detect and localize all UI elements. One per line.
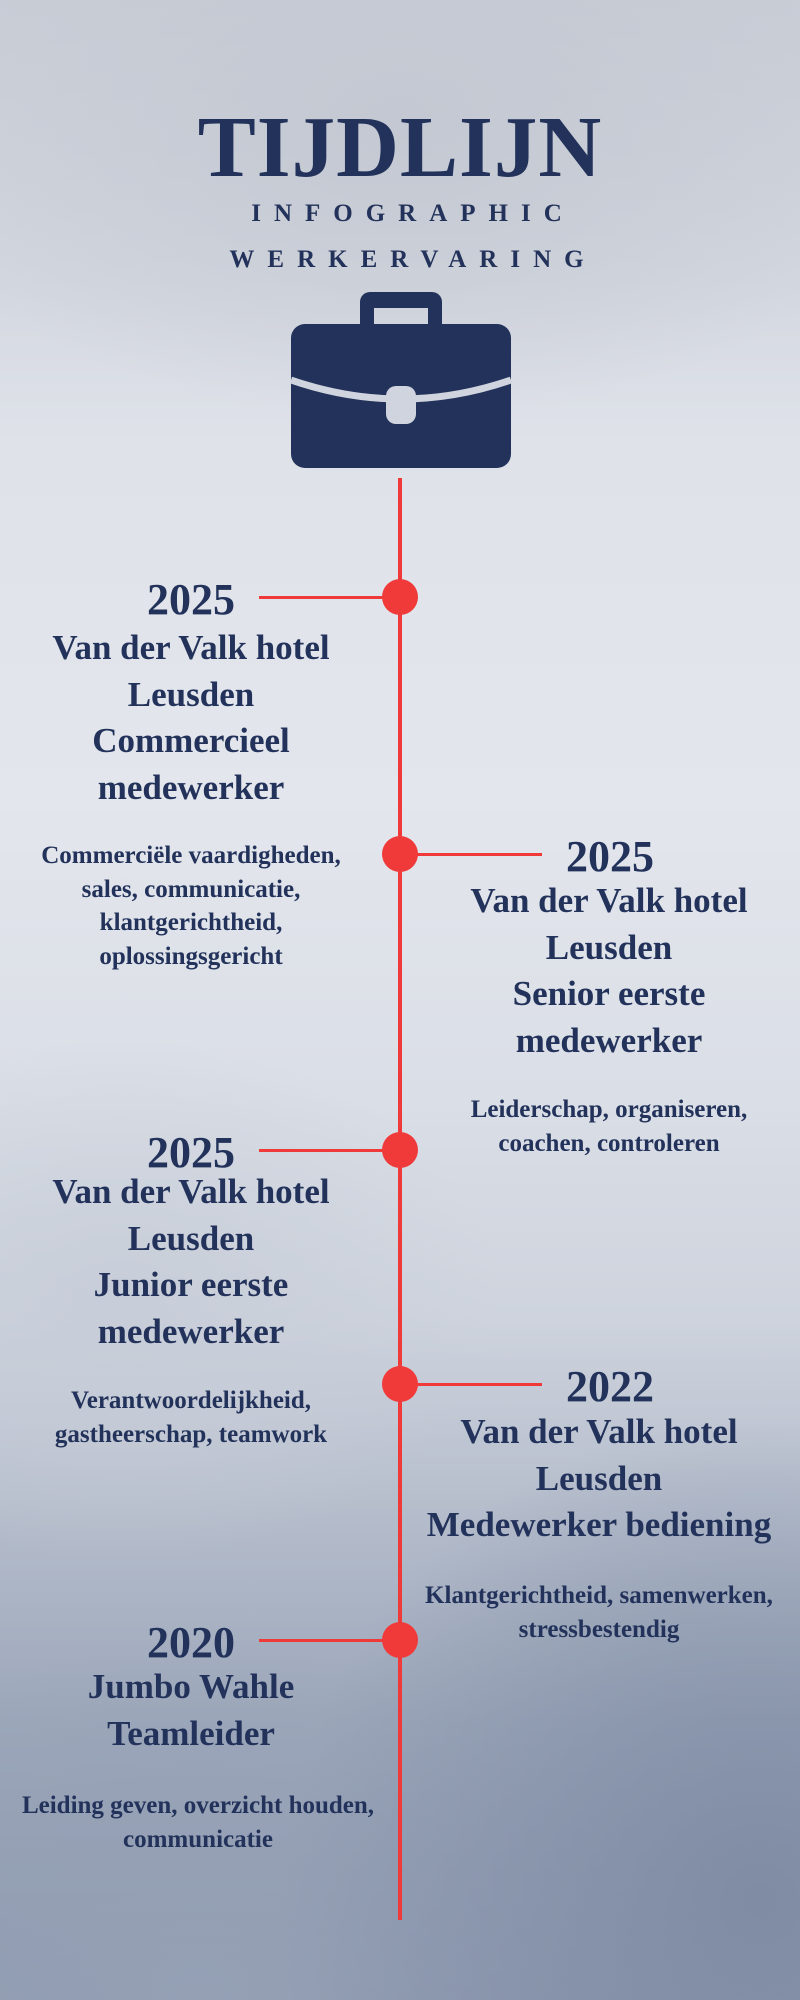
entry 3: Leusden xyxy=(128,1218,254,1258)
entry 5: Teamleider xyxy=(107,1714,275,1752)
entry 4: 2022 xyxy=(566,1362,654,1411)
entry 4: Leusden xyxy=(536,1458,662,1498)
connector xyxy=(400,853,542,856)
entry 2: Leiderschap, organiseren, xyxy=(471,1096,747,1123)
entry 1: sales, communicatie, xyxy=(82,876,300,902)
entry 2: Van der Valk hotel xyxy=(470,881,748,920)
entry 5 xyxy=(22,1618,418,1852)
entry 1: Commerciële vaardigheden, xyxy=(41,842,341,869)
connector xyxy=(259,1149,400,1152)
entry 4: Klantgerichtheid, samenwerken, xyxy=(425,1582,773,1609)
entry 1: oplossingsgericht xyxy=(99,942,283,970)
entry 5: 2020 xyxy=(147,1618,235,1667)
entry 1: klantgerichtheid, xyxy=(100,909,282,936)
connector xyxy=(400,1383,542,1386)
entry 4: Medewerker bediening xyxy=(427,1505,771,1544)
entry 5: Jumbo Wahle xyxy=(88,1667,294,1706)
entry 3: medewerker xyxy=(98,1312,284,1350)
entry 2: Senior eerste xyxy=(513,974,705,1013)
entry 3: Verantwoordelijkheid, xyxy=(71,1387,311,1414)
connector xyxy=(259,1639,400,1642)
entry 3: Van der Valk hotel xyxy=(52,1172,330,1211)
subtitle: INFOGRAPHIC xyxy=(251,200,575,227)
entry 5: communicatie xyxy=(123,1826,273,1852)
entry 1: Van der Valk hotel xyxy=(52,628,330,667)
entry 2: coachen, controleren xyxy=(498,1130,720,1156)
dot xyxy=(382,1132,418,1168)
dot xyxy=(382,1622,418,1658)
entry 3: Junior eerste xyxy=(94,1265,288,1304)
entry 4 xyxy=(382,1362,773,1642)
dot xyxy=(382,836,418,872)
connector xyxy=(259,596,400,599)
entry 1: 2025 xyxy=(147,575,235,624)
entry 2 xyxy=(382,832,748,1156)
entry 3: gastheerschap, teamwork xyxy=(55,1420,327,1448)
entry 1: Leusden xyxy=(128,674,254,714)
entry 1 xyxy=(41,575,418,970)
entry 2: Leusden xyxy=(546,928,672,966)
subtitle line 2: WERKERVARING xyxy=(229,246,597,273)
entry 1: Commercieel xyxy=(92,721,290,760)
entry 4: stressbestendig xyxy=(519,1616,679,1642)
timeline line xyxy=(398,478,402,1920)
entry 3: 2025 xyxy=(147,1128,235,1177)
entry 3 xyxy=(52,1128,418,1448)
entry 2: 2025 xyxy=(566,832,654,881)
entry 5: Leiding geven, overzicht houden, xyxy=(22,1792,374,1819)
entry 4: Van der Valk hotel xyxy=(460,1412,738,1451)
dot xyxy=(382,1366,418,1402)
entry 2: medewerker xyxy=(516,1020,702,1060)
title: TIJDLIJN xyxy=(198,98,602,195)
entry 1: medewerker xyxy=(98,768,284,806)
dot xyxy=(382,579,418,615)
icon: briefcase xyxy=(290,292,512,468)
